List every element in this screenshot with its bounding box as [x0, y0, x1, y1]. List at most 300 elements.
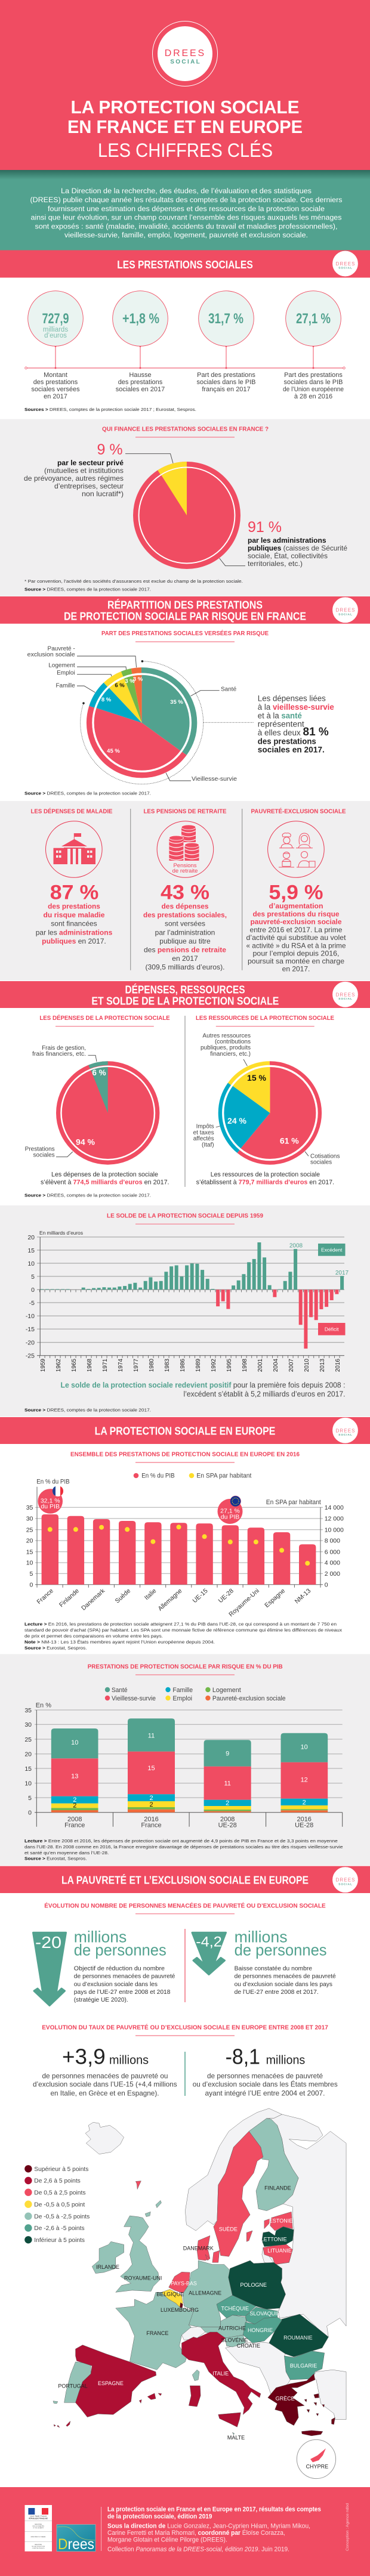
callout: 81 %: et à la santé [258, 711, 302, 720]
stat: -8,1 millions: de personnes menacées de pauvreté [207, 2071, 323, 2080]
bar: France 2016: 2016 [144, 1816, 159, 1823]
chart: prestations en % du PIB: 10 [26, 1560, 33, 1567]
block: -20 millions: -20 [35, 1933, 61, 1952]
panel: ressources: LES RESSOURCES DE LA PROTECTION SOCIALE [196, 1015, 334, 1022]
stat: 31,7 %: 31,7 % [208, 311, 243, 327]
column: pensions de retraite: de retraite [172, 868, 198, 874]
column: pauvreté-exclusion: d’activité qui substitue au volet [246, 933, 346, 942]
callout: 81 %: à elles deux 81 % [258, 726, 329, 738]
bar: France 2016: 2 [149, 1795, 153, 1802]
chart: prestations en % du PIB: Suède [114, 1587, 132, 1605]
bar: UE-28 2008 [204, 1740, 251, 1829]
label: 91 %: publiques (caisses de Sécurité [248, 544, 347, 552]
panel: prestations par risque: PRESTATIONS DE PROTECTION SOCIALE PAR RISQUE EN % DU PIB [88, 1663, 283, 1670]
credits: Carine Ferretti et Maria Rhomari, coordonné par Éloïse Corazza, [107, 2529, 285, 2537]
icon: coin stacks [169, 825, 199, 861]
panel: ressources: Cotisations [310, 1153, 340, 1159]
bar: France 2008: 2008 [67, 1816, 82, 1823]
stat: 727,9 milliards: d’euros [44, 332, 67, 339]
stat: 27,1 %: Part des prestations [284, 372, 343, 379]
stat: 31,7 %: Part des prestations [197, 372, 255, 379]
column: pensions de retraite: LES PENSIONS DE RETRAITE [143, 808, 227, 815]
stat: 727,9 milliards: milliards [43, 326, 68, 333]
tag: déficit: Déficit [325, 1326, 339, 1332]
chart: solde bars: En milliards d’euros [39, 1230, 83, 1236]
chart: prestations en % du PIB: 0 [325, 1581, 328, 1588]
legend: En SPA par habitant [196, 1472, 251, 1479]
bar: France 2016: France [141, 1822, 162, 1829]
column: pauvreté-exclusion: pauvreté-exclusion sociale [251, 918, 342, 926]
chart: solde bars: 1974 [118, 1359, 124, 1372]
logo: ministères: ET DE LA SANTÉ [33, 2527, 44, 2529]
chart: solde bars: 2010 [304, 1359, 310, 1372]
chart: stacked bars: 10 [24, 1780, 32, 1787]
stat: -8,1 millions: -8,1 [226, 2045, 260, 2069]
caption: Les dépenses de la protection sociale [51, 1171, 158, 1179]
legend: En % du PIB [141, 1472, 175, 1479]
caption: Le solde de la protection sociale redevient positif pour la première fois depuis 2008 : [61, 1381, 346, 1390]
bar: UE-28 2016: 2016 [297, 1816, 312, 1823]
pie: financement [116, 445, 257, 586]
banner: dépenses, ressources: ET SOLDE DE LA PROTECTION SOCIALE [91, 995, 279, 1007]
banner: europe: SOCIAL [338, 1433, 352, 1436]
panel: ressources: affectés [193, 1136, 214, 1142]
chart: stacked bars: 15 [24, 1765, 32, 1773]
stat: +3,9 millions: d’exclusion sociale dans l’UE-15 (+4,4 millions [33, 2080, 177, 2089]
credits: de la protection sociale, édition 2019 [107, 2513, 212, 2521]
label: 91 %: par les administrations [248, 537, 326, 545]
banner: répartition: DREES [335, 608, 354, 613]
column: pensions de retraite: en 2017 [172, 954, 198, 963]
heading: évolution du taux: EVOLUTION DU TAUX DE PAUVRETÉ OU D’EXCLUSION SOCIALE EN EUROPE ENTRE 2008 ET 2017 [42, 2023, 328, 2031]
chart: solde bars: 1968 [87, 1359, 93, 1372]
column: pensions de retraite [143, 808, 227, 972]
intro band [0, 170, 370, 251]
stat: 727,9 milliards [28, 291, 83, 400]
bar: France 2008: 2 [73, 1796, 76, 1804]
pie: prestations par risque: Pauvreté - [48, 646, 75, 652]
chart: prestations en % du PIB: Espagne [263, 1587, 286, 1609]
credits: Morgane Glotain et Céline Pilorge (DREES). [107, 2536, 227, 2543]
stat: 27,1 %: sociales dans le PIB [283, 379, 343, 386]
panel: dépenses [25, 1014, 172, 1186]
stat: -8,1 millions: millions [266, 2054, 305, 2067]
logo: ministères [25, 2505, 52, 2552]
tag: excédent [318, 1244, 345, 1256]
map legend: De -2,6 à -5 points [34, 2225, 85, 2232]
heading: QUI FINANCE LES PRESTATIONS SOCIALES EN FRANCE ? [102, 426, 269, 433]
bar: UE-28 2016: 10 [301, 1744, 308, 1751]
notes: standard de pouvoir d’achat (SPA) par habitant. Les SPA sont une monnaie fictive de référence commune qui élimine les différences de niveaux [24, 1628, 342, 1633]
panel: ressources [193, 1015, 340, 1186]
pie: prestations par risque: exclusion sociale [27, 652, 75, 658]
pie: prestations par risque: 3 % [125, 678, 135, 685]
callout: 81 %: Les dépenses liées [258, 694, 326, 703]
stat: 27,1 %: à 28 en 2016 [294, 393, 332, 400]
stat: 31,7 % [196, 291, 256, 393]
chart: solde bars: 10 [27, 1260, 35, 1267]
caption: s’établissent à 779,7 milliards d’euros en 2017. [196, 1179, 334, 1186]
stat: +3,9 millions: +3,9 [62, 2045, 106, 2069]
pie: prestations par risque: Famille [56, 683, 75, 689]
note and source [24, 579, 243, 592]
chart: prestations en % du PIB: 20 [26, 1538, 33, 1545]
label: 9 %: (mutuelles et institutions [44, 466, 124, 475]
stat: +1,8 %: sociales en 2017 [116, 386, 165, 393]
source: Source > DREES, comptes de la protection sociale 2017. [24, 791, 151, 796]
source: Sources > DREES, comptes de la protection sociale 2017 ; Eurostat, Sespros. [24, 407, 196, 412]
chart: stacked bars: 20 [24, 1751, 32, 1758]
map legend: De 2,6 à 5 points [34, 2178, 81, 2185]
stat: +3,9 millions: en Italie, en Grèce et en Espagne). [50, 2089, 159, 2097]
chart: solde bars: 1965 [71, 1359, 78, 1372]
chart: solde bars: -10 [26, 1313, 35, 1320]
column: pauvreté-exclusion: pour l’emploi depuis 2016, [253, 949, 339, 957]
panel: solde: LE SOLDE DE LA PROTECTION SOCIALE DEPUIS 1959 [107, 1213, 263, 1220]
column: pensions de retraite: des pensions de retraite [144, 946, 226, 954]
notes [24, 1838, 343, 1861]
banner: les prestations sociales [0, 251, 370, 278]
note and source: * Par convention, l’activité des sociétés d’assurances est exclue du champ de la protection sociale. [24, 579, 243, 584]
map labels: FRANCE [146, 2330, 168, 2336]
column: dépenses de maladie: LES DÉPENSES DE MALADIE [31, 807, 112, 815]
notes: et santé qu’en moyenne dans l’UE-28. [24, 1850, 109, 1856]
chart: stacked bars: 30 [24, 1721, 32, 1728]
legend: Logement [212, 1687, 241, 1694]
banner: dépenses, ressources [0, 981, 370, 1008]
chart: prestations en % du PIB: En % du PIB [36, 1479, 70, 1486]
stat: 727,9 milliards: en 2017 [44, 393, 67, 400]
logo: DREES social: SOCIAL [170, 59, 200, 66]
column: pauvreté-exclusion: 5,9 % [269, 882, 323, 904]
intro band: vieillesse-survie, famille, emploi, logement, pauvreté et exclusion sociale. [64, 231, 308, 239]
bar: UE-28 2016: 2 [303, 1799, 306, 1806]
caption: s’élèvent à 774,5 milliards d’euros en 2017. [41, 1179, 169, 1186]
label: 9 %: non lucratif*) [82, 490, 124, 498]
label: 9 %: par le secteur privé [57, 460, 124, 467]
caption [196, 1171, 334, 1186]
map labels: SLOVÉNIE [221, 2337, 248, 2343]
map labels: SLOVAQUIE [249, 2311, 280, 2317]
legend [134, 1472, 251, 1479]
chart: stacked bars: 5 [28, 1795, 32, 1802]
chart: prestations en % du PIB: Danemark [80, 1587, 107, 1612]
map labels: ESTONIE [269, 2218, 292, 2224]
column: dépenses de maladie: sont financées [51, 920, 97, 928]
chart: prestations en % du PIB: 35 [26, 1504, 33, 1511]
chart: prestations en % du PIB: Italie [143, 1587, 158, 1601]
map labels: TCHÉQUIE [221, 2305, 249, 2311]
chart: solde bars: 1980 [149, 1359, 155, 1372]
notes: dans l’UE-28. En 2008 comme en 2016, la France enregistre davantage de dépenses de prestations sociales au titre des risques vieillesse-survie [24, 1844, 343, 1850]
stat: +3,9 millions: millions [109, 2054, 149, 2067]
chart: solde bars: -20 [26, 1340, 35, 1347]
callout: 81 %: représentent [258, 720, 304, 729]
block: -4,2 millions: de personnes menacées de pauvreté [235, 1973, 336, 1980]
block: -20 millions: de personnes menacées de pauvreté [74, 1973, 175, 1980]
chart: prestations en % du PIB: 14 000 [325, 1504, 344, 1511]
panel: ressources: Autres ressources [202, 1032, 251, 1039]
chart: prestations en % du PIB: UE-28 [217, 1587, 235, 1604]
chart: prestations en % du PIB: Finlande [58, 1587, 81, 1609]
stat: +1,8 %: Hausse [129, 372, 152, 379]
pie: prestations par risque: 45 % [107, 748, 120, 754]
chart: solde bars: 1977 [133, 1359, 140, 1372]
heading: ensemble des prestations: ENSEMBLE DES PRESTATIONS DE PROTECTION SOCIALE EN EUROPE EN 2016 [70, 1451, 300, 1458]
callout: France 32,1 %: 32,1 % [41, 1497, 60, 1504]
map labels: GRÈCE [276, 2395, 295, 2401]
credits: La protection sociale en France et en Europe en 2017, résultats des comptes [107, 2506, 321, 2513]
panel: ressources: (Itaf) [202, 1142, 214, 1148]
heading: évolution du nombre: ÉVOLUTION DU NOMBRE DE PERSONNES MENACÉES DE PAUVRETÉ OU D’EXCLUSION SOCIALE [44, 1901, 326, 1909]
pie: ressources: 61 % [280, 1136, 299, 1145]
tag: excédent: Excédent [321, 1247, 343, 1253]
stat: 727,9 milliards: sociales versées [31, 386, 80, 393]
map legend: Inférieur à 5 points [34, 2237, 85, 2244]
credit: conception: Conception : Agence ndbd [346, 2503, 350, 2551]
map legend: De -0,5 à 0,5 point [34, 2201, 85, 2208]
column: pauvreté-exclusion: PAUVRETÉ-EXCLUSION SOCIALE [251, 807, 346, 815]
chart: stacked bars: 35 [24, 1707, 32, 1714]
map labels: LUXEMBOURG [161, 2307, 199, 2313]
pie: dépenses [43, 1049, 172, 1177]
arrow: -20 [33, 1932, 66, 2005]
inset: Chypre: CHYPRE [306, 2463, 328, 2469]
bar: France 2008: France [64, 1822, 85, 1829]
pie: prestations par risque: 3 % [133, 676, 143, 683]
credits: Sous la direction de Lucie Gonzalez, Jean-Cyprien Héam, Myriam Mikou, [107, 2522, 310, 2529]
block: -20 millions [33, 1928, 175, 2005]
logo: ministères: RÉPUBLIQUE FRANÇAISE [29, 2518, 48, 2519]
map labels: PAYS-BAS [171, 2281, 197, 2287]
column: pauvreté-exclusion: poursuit sa montée en charge [248, 957, 344, 966]
logo: DREES social [153, 21, 217, 86]
callout: UE-28 27,1 %: du PIB [221, 1514, 239, 1521]
callout: France 32,1 % [38, 1486, 63, 1514]
stat: -8,1 millions: ou d’exclusion sociale dans les États membres [193, 2080, 338, 2089]
map labels: ROYAUME-UNI [124, 2275, 162, 2281]
column: pauvreté-exclusion: des prestations du risque [253, 910, 340, 919]
chart: prestations en % du PIB: 10 000 [325, 1526, 344, 1533]
icon: hospital building [54, 833, 95, 864]
logo: ministères: MINISTÈRE [35, 2524, 42, 2525]
pie: prestations par risque: Logement [48, 663, 75, 669]
intro band: La Direction de la recherche, des études, de l’évaluation et des statistiques [61, 187, 312, 195]
logo: ministères: MINISTÈRE [35, 2544, 42, 2546]
logo: ministères: COMPTES PUBLICS [32, 2548, 45, 2549]
title: EN FRANCE ET EN EUROPE [67, 117, 303, 137]
chart: solde bars: -5 [29, 1300, 35, 1307]
panel: ressources: Impôts [196, 1124, 214, 1130]
map labels: ROUMANIE [283, 2335, 313, 2341]
panel: dépenses: LES DÉPENSES DE LA PROTECTION SOCIALE [39, 1014, 170, 1022]
chart: solde bars: 2008 [289, 1243, 303, 1250]
chart: prestations en % du PIB: 12 000 [325, 1516, 344, 1523]
logo: ministères: DE L’ACTION ET DES [32, 2546, 45, 2547]
banner: dépenses, ressources: DÉPENSES, RESSOURCES [125, 984, 245, 996]
map legend: Supérieur à 5 points [34, 2166, 88, 2173]
bar: France 2016 [128, 1718, 175, 1829]
block: -4,2 millions [192, 1928, 336, 1996]
chart: solde bars: 2001 [257, 1359, 264, 1372]
panel: ressources: sociales [310, 1159, 332, 1166]
label: 91 %: sociale, État, collectivités [248, 551, 328, 560]
chart: stacked bars: En % [36, 1702, 51, 1709]
block: -4,2 millions: Baisse constatée du nombre [235, 1965, 312, 1972]
label: 9 % [24, 441, 173, 498]
map labels: MALTE [227, 2435, 245, 2441]
column: pensions de retraite: par l’administration [155, 928, 215, 936]
column: pensions de retraite: sont versées [165, 920, 205, 928]
chart: prestations en % du PIB: 4 000 [325, 1560, 340, 1567]
stat: 27,1 %: 27,1 % [296, 311, 331, 327]
legend: Pauvreté-exclusion sociale [212, 1695, 285, 1702]
panel: ressources: financiers, etc.) [210, 1051, 251, 1057]
column: pensions de retraite: Pensions [173, 862, 197, 869]
stat: +3,9 millions: de personnes menacées de pauvreté ou [42, 2071, 168, 2080]
notes: de prix et permet des comparaisons en volume entre les pays. [24, 1634, 163, 1639]
block: -4,2 millions: ou d’exclusion sociale dans les pays [235, 1981, 332, 1988]
panel: ressources: et taxes [193, 1130, 214, 1136]
chart: solde bars: 1995 [226, 1359, 233, 1372]
map labels: PORTUGAL [58, 2383, 88, 2389]
stat: +3,9 millions [33, 2045, 177, 2097]
inset: Chypre [297, 2439, 336, 2479]
chart: prestations en % du PIB: 8 000 [325, 1538, 340, 1545]
notes: Lecture > En 2016, les prestations de protection sociale atteignent 27,1 % du PIB dans l’UE-28, ce qui correspond à un montant de 7 750 en [24, 1622, 337, 1627]
map labels [58, 2185, 317, 2441]
column: pensions de retraite: des prestations sociales, [143, 911, 227, 919]
column: dépenses de maladie: des prestations [48, 902, 100, 910]
column: pensions de retraite: publique au titre [159, 937, 211, 945]
logo: ministères: Liberté • Égalité • Fraternité [30, 2516, 47, 2517]
chart: stacked bars [24, 1702, 343, 1829]
banner: répartition: SOCIAL [338, 613, 352, 616]
chart: solde bars: 5 [31, 1273, 35, 1281]
stat: +1,8 %: des prestations [118, 379, 163, 386]
column: pauvreté-exclusion: « activité » du RSA et à la prime [246, 941, 346, 950]
title: LES CHIFFRES CLÉS [98, 140, 273, 161]
map labels: POLOGNE [240, 2282, 267, 2288]
block: -4,2 millions: -4,2 [196, 1934, 222, 1950]
bar: UE-28 2008: 9 [226, 1750, 229, 1757]
pie: prestations par risque: 8 % [101, 697, 112, 703]
banner: europe: LA PROTECTION SOCIALE EN EUROPE [95, 1425, 275, 1437]
intro band: ainsi que leur évolution, sur un champ couvrant l’ensemble des risques auxquels les ménages [31, 214, 341, 222]
label: 91 %: 91 % [248, 519, 282, 536]
map labels: CROATIE [237, 2343, 260, 2349]
stat: -8,1 millions: ayant intégré l’UE entre 2004 et 2007. [205, 2089, 325, 2097]
pie: dépenses: 6 % [92, 1068, 106, 1077]
map labels: ITALIE [212, 2371, 229, 2377]
title [67, 97, 303, 161]
map labels: LETTONIE [261, 2237, 287, 2243]
chart: solde bars: 2013 [319, 1359, 326, 1372]
pie: ressources [220, 1063, 320, 1163]
note and source: Source > DREES, comptes de la protection sociale 2017. [24, 587, 151, 592]
bar: UE-28 2008: 2 [226, 1800, 229, 1807]
chart: prestations en % du PIB: 25 [26, 1526, 33, 1533]
column: dépenses de maladie: 87 % [50, 882, 98, 904]
pie: ressources: 15 % [247, 1073, 267, 1083]
callout: 81 %: des prestations [258, 737, 316, 746]
bar: UE-28 2016: UE-28 [295, 1822, 313, 1829]
panel: dépenses: sociales [33, 1152, 55, 1158]
banner: dépenses, ressources: DREES [335, 992, 354, 997]
stat: 31,7 %: sociales dans le PIB [196, 379, 256, 386]
block: -20 millions: millions [74, 1928, 127, 1946]
map labels: SUÈDE [219, 2226, 238, 2232]
banner: pauvreté: DREES [335, 1878, 354, 1883]
banner: répartition: DE PROTECTION SOCIALE PAR RISQUE EN FRANCE [64, 611, 306, 623]
block: -20 millions: de personnes [74, 1941, 166, 1959]
chart: solde bars: 1959 [40, 1359, 47, 1372]
intro band: fournissent une estimation des dépenses et des ressources de la protection sociale [48, 205, 325, 213]
bar: UE-28 2016 [280, 1733, 328, 1829]
chart: solde bars: 1971 [102, 1359, 109, 1372]
column: dépenses de maladie [31, 807, 113, 945]
map labels: HONGRIE [248, 2327, 273, 2333]
map labels: LITUANIE [267, 2248, 292, 2254]
notes: Note > NM-13 : Les 13 États membres ayant rejoint l’Union européenne depuis 2004. [24, 1639, 215, 1644]
panel: dépenses: Frais de gestion, [42, 1045, 86, 1052]
map labels: AUTRICHE [218, 2325, 246, 2331]
caption: Les ressources de la protection sociale [211, 1171, 320, 1179]
header [0, 0, 370, 170]
chart: prestations en % du PIB: Royaume-Uni [227, 1587, 261, 1618]
column: pauvreté-exclusion [246, 807, 346, 973]
chart: stacked bars: 25 [24, 1736, 32, 1743]
panel: ressources: (contributions [215, 1038, 251, 1045]
title: LA PROTECTION SOCIALE [70, 97, 300, 117]
banner: dépenses, ressources: SOCIAL [338, 997, 352, 1000]
banner: les prestations sociales: DREES [335, 261, 354, 267]
bar: UE-28 2008: UE-28 [218, 1822, 237, 1829]
banner: les prestations sociales: LES PRESTATIONS SOCIALES [117, 259, 253, 271]
chart: prestations en % du PIB: Allemagne [157, 1587, 184, 1612]
chart: prestations en % du PIB: UE-15 [191, 1587, 209, 1604]
banner: pauvreté [0, 1866, 370, 1893]
stat: +1,8 %: +1,8 % [122, 311, 159, 327]
label: 9 %: de prévoyance, autres régimes [24, 474, 124, 483]
chart: solde bars: 1983 [164, 1359, 171, 1372]
bar: France 2008: 13 [71, 1773, 78, 1780]
pie: dépenses: 94 % [76, 1137, 95, 1146]
label: 91 % [220, 519, 347, 568]
chart: prestations en % du PIB: 15 [26, 1548, 33, 1556]
chart: solde bars: -15 [26, 1326, 35, 1333]
stat: 31,7 %: français en 2017 [202, 386, 251, 393]
callout: 81 %: à la vieillesse-survie [258, 703, 334, 712]
callout: UE-28 27,1 % [217, 1496, 242, 1524]
block: -20 millions: pays de l’UE-27 entre 2008 et 2018 [74, 1989, 171, 1996]
logo: Drees: Drees [58, 2536, 94, 2553]
intro band: (DREES) publie chaque année les résultats des comptes de la protection sociale. Ces derniers [30, 196, 343, 204]
chart: prestations en % du PIB: 30 [26, 1516, 33, 1523]
chart: solde bars: 1962 [56, 1359, 62, 1372]
notes [24, 1622, 342, 1650]
bar: France 2016: 11 [148, 1732, 155, 1739]
map labels: IRLANDE [96, 2264, 119, 2270]
source: Source > DREES, comptes de la protection sociale 2017. [24, 1193, 151, 1198]
banner: répartition [0, 596, 370, 624]
panel: solde [0, 1205, 370, 1417]
heading: part des prestations: PART DES PRESTATIONS SOCIALES VERSÉES PAR RISQUE [101, 629, 269, 637]
chart: prestations en % du PIB: 5 [30, 1570, 33, 1578]
block: -20 millions: Objectif de réduction du nombre [74, 1965, 165, 1972]
block: -4,2 millions: de l’UE-27 entre 2008 et 2017. [235, 1989, 319, 1996]
map legend [24, 2165, 90, 2244]
